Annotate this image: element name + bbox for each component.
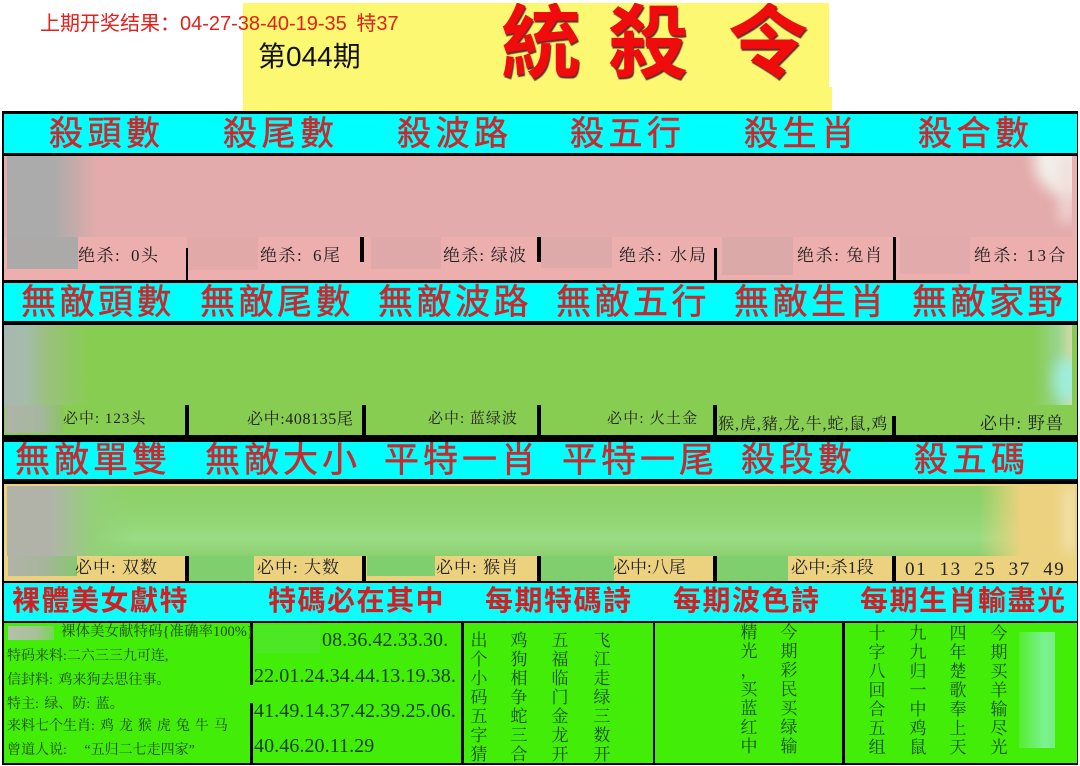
- heading: wave poem: 每期波色詩: [673, 585, 821, 616]
- poem column 2: 鸡: [910, 719, 926, 738]
- label: zodiac: 绝杀: 兔肖: [797, 246, 884, 265]
- label: zodiac: 必中: 猴肖: [436, 558, 519, 577]
- poem column 1: 蓝: [740, 699, 758, 718]
- poem column 3: 临: [552, 669, 568, 688]
- line 3: 信封料: 鸡来狗去思往事。: [7, 673, 170, 688]
- poem column 1: 出: [470, 631, 488, 650]
- panel header row 1: [4, 114, 1077, 153]
- panel header row 3: [4, 442, 1077, 479]
- panel body row 2: [4, 325, 1077, 435]
- special numbers block: [254, 629, 456, 757]
- panel body row 3: [4, 484, 1077, 581]
- heading: one zodiac: 平特一肖: [384, 441, 540, 480]
- poem column 1: [868, 624, 886, 757]
- poem column 3: 五: [552, 631, 568, 650]
- poem column 1: 五: [868, 719, 886, 738]
- poem column 2: 输: [780, 737, 798, 756]
- poem column 3: 上: [950, 719, 966, 738]
- heading: invincible elements: 無敵五行: [556, 283, 710, 322]
- poem column 3: 歌: [950, 681, 966, 700]
- poem column 1: 回: [868, 681, 886, 700]
- label: big small: 必中: 大数: [257, 558, 340, 577]
- poem column 2: 鼠: [910, 738, 926, 757]
- big title: 統殺令: [501, 0, 808, 88]
- poem column 2: 归: [910, 662, 926, 681]
- label: element: 必中: 火土金: [607, 411, 698, 427]
- heading: invincible tail: 無敵尾數: [200, 283, 354, 322]
- poem column 1: [470, 631, 488, 763]
- line 2: 特码来料:二六三三九可连,: [7, 649, 168, 664]
- poem column 3: 福: [552, 650, 568, 669]
- label: element: 绝杀: 水局: [619, 246, 708, 265]
- poem column 3: 楚: [950, 662, 966, 681]
- poem: wave: [740, 623, 798, 756]
- poem column 4: 买: [990, 662, 1008, 681]
- poem column 2: 三: [510, 726, 528, 745]
- issue number: 第044期: [258, 41, 361, 72]
- poem column 2: 买: [780, 699, 798, 718]
- heading: kill wave: 殺波路: [397, 115, 512, 153]
- poem column 1: 码: [470, 688, 488, 707]
- label: zodiac: 猴,虎,豬,龙,牛,蛇,鼠,鸡: [718, 416, 888, 433]
- poem column 2: 彩: [780, 661, 798, 680]
- poem column 2: 狗: [510, 650, 528, 669]
- heading: kill tail: 殺尾數: [223, 115, 338, 153]
- label: sum: 绝杀: 13合: [974, 246, 1068, 265]
- poem column 3: 奉: [950, 700, 966, 719]
- label: tail: 必中:八尾: [613, 558, 686, 577]
- poem column 2: 一: [910, 681, 926, 700]
- label: head: 必中: 123头: [63, 411, 146, 427]
- poem column 4: 飞: [594, 631, 610, 650]
- poem column 1: 个: [470, 650, 488, 669]
- panel header row 4: [4, 583, 1077, 621]
- poem column 4: [594, 631, 610, 763]
- heading: nude beauty: 裸體美女獻特: [12, 585, 189, 616]
- poem column 2: 期: [780, 642, 798, 661]
- heading: zodiac poem: 每期生肖輸盡光: [860, 585, 1067, 616]
- line 1: 裸体美女献特码{准确率100%}: [61, 624, 254, 640]
- label: single double: 必中: 双数: [75, 558, 158, 577]
- poem column 4: 期: [990, 643, 1008, 662]
- heading: one tail: 平特一尾: [562, 441, 718, 480]
- poem column 2: [510, 631, 528, 763]
- poem column 4: 绿: [594, 688, 610, 707]
- label: wave: 必中: 蓝绿波: [428, 411, 518, 427]
- poem column 2: 九: [910, 624, 926, 643]
- heading: invincible home wild: 無敵家野: [912, 283, 1066, 322]
- heading: kill zodiac: 殺生肖: [744, 115, 860, 153]
- panel body row 4: [4, 623, 1077, 763]
- poem column 2: 相: [510, 669, 528, 688]
- result line: 上期开奖结果：04-27-38-40-19-35 特37: [40, 13, 399, 35]
- poem column 2: 中: [910, 700, 926, 719]
- heading: big small: 無敵大小: [205, 441, 361, 480]
- poem column 1: 精: [740, 623, 758, 642]
- numbers 3: 41.49.14.37.42.39.25.06.: [254, 700, 456, 722]
- line 6: 曾道人说: “五归二七走四家”: [7, 743, 195, 758]
- poem column 1: 光: [740, 642, 758, 661]
- poem column 1: 字: [470, 726, 488, 745]
- poem column 1: 五: [470, 707, 488, 726]
- label: wave: 绝杀: 绿波: [443, 246, 527, 265]
- poem column 3: 年: [950, 643, 966, 662]
- line 4: 特主: 绿、防: 蓝。: [7, 697, 124, 712]
- label: tail: 绝杀: 6尾: [260, 246, 341, 265]
- poem column 1: 十: [868, 624, 886, 643]
- poem column 1: 字: [868, 643, 886, 662]
- poem column 2: 蛇: [510, 707, 528, 726]
- poem column 3: 龙: [552, 726, 568, 745]
- heading: single double: 無敵單雙: [15, 441, 171, 480]
- poem column 4: 输: [990, 700, 1008, 719]
- heading: kill sum: 殺合數: [918, 115, 1034, 153]
- panel header row 2: [4, 283, 1077, 321]
- poem column 1: 买: [740, 680, 758, 699]
- numbers 2: 22.01.24.34.44.13.19.38.: [254, 665, 456, 687]
- poem column 3: [950, 624, 966, 757]
- poem column 1: 小: [470, 669, 488, 688]
- heading: invincible head: 無敵頭數: [21, 283, 175, 322]
- heading: invincible wave: 無敵波路: [378, 283, 532, 322]
- poem column 2: [780, 623, 798, 756]
- poem column 4: 尽: [990, 719, 1008, 738]
- poem column 4: 江: [594, 650, 610, 669]
- poem column 2: 今: [780, 623, 798, 642]
- poem column 1: 合: [868, 700, 886, 719]
- heading: invincible zodiac: 無敵生肖: [734, 283, 888, 322]
- numbers 4: 40.46.20.11.29: [254, 735, 374, 757]
- poem column 4: 羊: [990, 681, 1008, 700]
- poem column 4: 数: [594, 726, 610, 745]
- poem column 4: 走: [594, 669, 610, 688]
- heading: kill elements: 殺五行: [570, 115, 686, 153]
- poem column 3: 门: [552, 688, 568, 707]
- line 5: 来料七个生肖: 鸡 龙 猴 虎 兔 牛 马: [7, 719, 228, 734]
- heading: special number: 特碼必在其中: [268, 585, 445, 616]
- label: tail: 必中:408135尾: [247, 411, 353, 428]
- poem column 3: 金: [552, 707, 568, 726]
- label: head: 绝杀: 0头: [78, 246, 159, 265]
- label: home wild: 必中: 野兽: [980, 414, 1064, 433]
- heading: kill five numbers: 殺五碼: [914, 441, 1030, 479]
- heading: kill segment: 殺段數: [741, 441, 856, 479]
- poem column 4: 今: [990, 624, 1008, 643]
- poem column 3: 天: [950, 738, 966, 757]
- numbers 1: 08.36.42.33.30.: [322, 629, 448, 651]
- poem column 2: 九: [910, 643, 926, 662]
- poem column 1: 红: [740, 718, 758, 737]
- poem column 3: [552, 631, 568, 763]
- heading: number poem: 每期特碼詩: [485, 585, 633, 616]
- panel body row 1: [4, 156, 1077, 280]
- poem column 2: 鸡: [510, 631, 528, 650]
- poem column 1: 组: [868, 738, 886, 757]
- poem column 2: [910, 624, 926, 757]
- poem column 2: 争: [510, 688, 528, 707]
- yellow title banner: [243, 3, 832, 111]
- poem: number: [470, 631, 610, 763]
- poem column 2: 绿: [780, 718, 798, 737]
- label: five numbers: 01 13 25 37 49: [905, 559, 1065, 580]
- label: segment: 必中:杀1段: [791, 558, 874, 577]
- heading: kill head: 殺頭數: [49, 115, 164, 153]
- nude beauty text block: [7, 623, 254, 758]
- poem column 1: ，: [740, 661, 758, 680]
- poem column 3: 四: [950, 624, 966, 643]
- poem column 2: 民: [780, 680, 798, 699]
- poem column 1: 八: [868, 662, 886, 681]
- poem column 1: 中: [740, 737, 758, 756]
- poem: zodiac: [868, 624, 1008, 757]
- poem column 4: 三: [594, 707, 610, 726]
- poem column 1: [740, 623, 758, 756]
- poem column 4: [990, 624, 1008, 757]
- poem column 4: 光: [990, 738, 1008, 757]
